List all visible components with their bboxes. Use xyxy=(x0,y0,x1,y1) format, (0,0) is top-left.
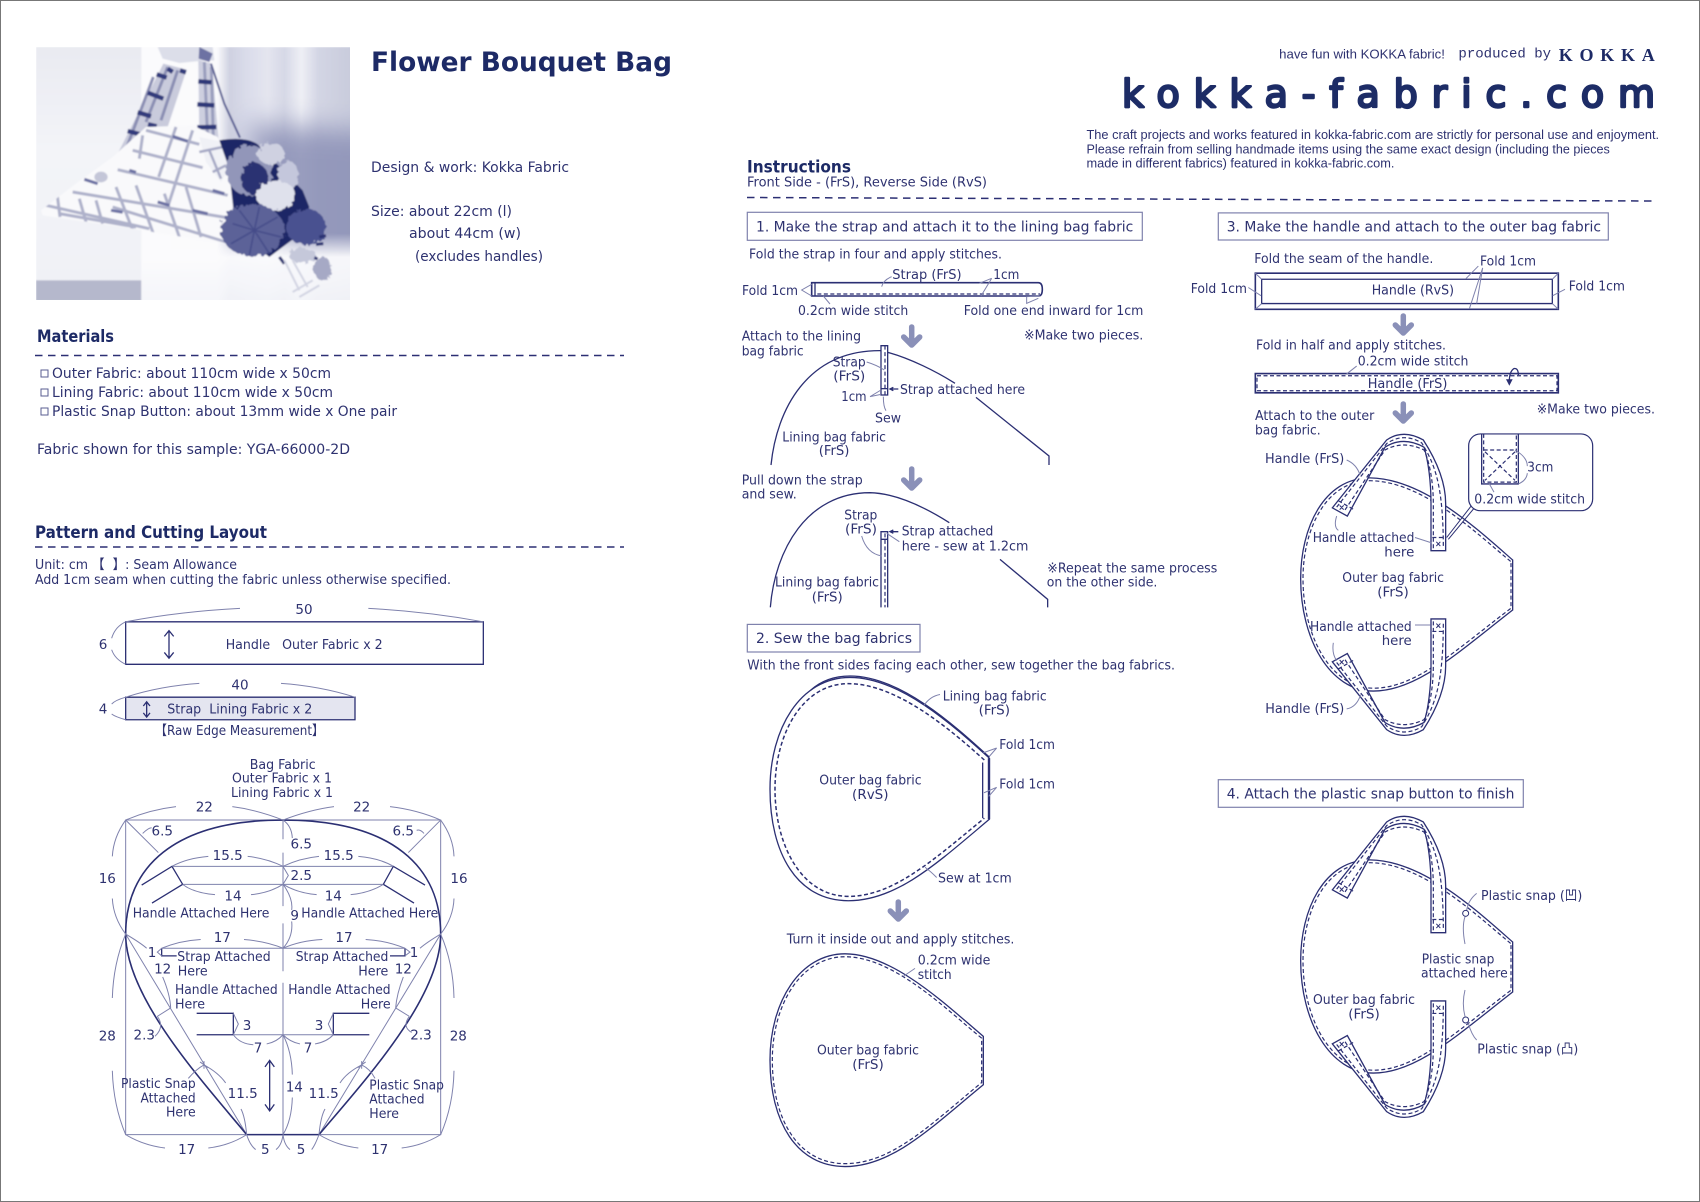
unit note xyxy=(35,557,451,588)
diagram: bag fabric pattern: Attached xyxy=(369,1092,424,1108)
site logotype: kokka-fabric.com xyxy=(1122,72,1655,116)
diagram: handle seam fold: Fold 1cm xyxy=(1569,279,1625,295)
diagram: bag fabric pattern: 14 xyxy=(325,888,342,904)
diagram: bag fabric pattern: 12 xyxy=(395,962,412,978)
diagram: handle seam fold: Fold 1cm xyxy=(1191,281,1247,297)
design and size text block xyxy=(371,160,569,265)
diagram: folded strap: Fold one end inward for 1cm xyxy=(964,303,1143,319)
diagram: pull down the strap xyxy=(742,472,1048,607)
title: Flower Bouquet Bag xyxy=(371,47,672,78)
diagram: bag fabric pattern: 17 xyxy=(335,930,353,946)
diagram: bag fabric pattern: Bag Fabric xyxy=(250,757,316,773)
step 1 heading box: 1. Make the strap and attach it to the lining bag fabric xyxy=(756,220,1133,236)
diagram: finished bag with snaps: Plastic snap xyxy=(1422,951,1494,967)
diagram: sew bag fabrics: Outer bag fabric xyxy=(819,772,922,788)
diagram: bag fabric pattern: 5 xyxy=(297,1142,305,1158)
diagram: turned bag with stitches: stitch xyxy=(918,967,952,983)
diagram: pull down the strap: Lining bag fabric xyxy=(775,575,879,591)
step 4 heading box: 4. Attach the plastic snap button to finish xyxy=(1227,786,1514,802)
panel: step 1 xyxy=(742,212,1217,607)
diagram: outer bag with handles: Outer bag fabric xyxy=(1342,570,1444,586)
diagram: bag fabric pattern: Handle Attached xyxy=(288,982,391,998)
panel: pattern and cutting layout xyxy=(35,523,624,1158)
diagram: bag fabric pattern: Here xyxy=(175,997,205,1013)
diagram: outer bag with handles: Handle attached xyxy=(1313,530,1414,546)
design and size text block: Design & work: Kokka Fabric xyxy=(371,160,569,176)
diagram: outer bag with handles: Handle (FrS) xyxy=(1265,451,1344,467)
arrow xyxy=(1395,316,1411,333)
callout: handle stitch detail: 0.2cm wide stitch xyxy=(1474,492,1585,508)
diagram: finished bag with snaps: attached here xyxy=(1421,966,1508,982)
note: repeat on other side: ※Repeat the same process xyxy=(1047,561,1217,577)
materials list: Plastic Snap Button: about 13mm wide x One pair xyxy=(52,404,397,420)
panel: materials xyxy=(35,327,624,458)
diagram: bag fabric pattern: 6.5 xyxy=(393,823,414,839)
diagram: bag fabric pattern: 11.5 xyxy=(309,1086,339,1102)
KOKKA wordmark: KOKKA xyxy=(1559,45,1655,65)
diagram: pull down the strap: (FrS) xyxy=(812,589,843,605)
diagram: bag fabric pattern: Lining Fabric x 1 xyxy=(231,785,333,801)
diagram: sew bag fabrics: Fold 1cm xyxy=(999,776,1055,792)
diagram: attach strap to lining: (FrS) xyxy=(833,369,865,385)
note: repeat on other side: on the other side. xyxy=(1047,575,1157,591)
diagram: strap piece: 【Raw Edge Measurement】 xyxy=(155,723,324,739)
heading: pattern and cutting layout: Pattern and Cutting Layout xyxy=(35,523,267,542)
diagram: bag fabric pattern: 2.3 xyxy=(134,1027,155,1043)
text: attach to outer bag: bag fabric. xyxy=(1255,422,1321,438)
diagram: finished bag with snaps xyxy=(1301,816,1582,1117)
diagram: bag fabric pattern: 3 xyxy=(243,1018,251,1034)
diagram: attach strap to lining: Attach to the lining xyxy=(742,329,861,345)
diagram: folded strap: 1cm xyxy=(993,267,1019,283)
diagram: bag fabric pattern: 15.5 xyxy=(324,848,354,864)
diagram: strap piece: 4 xyxy=(99,702,107,718)
arrow xyxy=(890,902,906,919)
diagram: bag fabric pattern: 2.5 xyxy=(291,868,312,884)
diagram: handle seam fold xyxy=(1191,251,1625,309)
diagram: handle piece: 6 xyxy=(99,637,107,653)
diagram: outer bag with handles: here xyxy=(1382,633,1412,649)
note: make two pieces: ※Make two pieces. xyxy=(1024,327,1143,343)
design and size text block: about 44cm (w) xyxy=(409,226,521,242)
diagram: handle piece: Handle Outer Fabric x 2 xyxy=(226,637,383,653)
diagram: pull down the strap: Strap xyxy=(844,507,877,523)
panel: step 1: Fold the strap in four and apply stitches. xyxy=(749,246,1002,262)
diagram: bag fabric pattern: Handle Attached xyxy=(175,982,278,998)
diagram: pull down the strap: here - sew at 1.2cm xyxy=(902,538,1028,554)
panel: step 2: Turn it inside out and apply stitches. xyxy=(786,932,1014,948)
diagram: bag fabric pattern: Strap Attached xyxy=(177,949,271,965)
diagram: bag fabric pattern: Here xyxy=(166,1105,196,1121)
header: brand block xyxy=(1086,45,1659,171)
diagram: folded strap: Strap (FrS) xyxy=(892,267,962,283)
diagram: bag fabric pattern: Here xyxy=(358,963,388,979)
callout: handle stitch detail: 3cm xyxy=(1527,459,1553,475)
diagram: bag fabric pattern xyxy=(99,757,468,1158)
diagram: bag fabric pattern: 17 xyxy=(214,930,231,946)
diagram: bag fabric pattern: 16 xyxy=(99,871,116,887)
materials list: Lining Fabric: about 110cm wide x 50cm xyxy=(52,385,333,401)
diagram: bag fabric pattern: 14 xyxy=(224,888,242,904)
diagram: bag fabric pattern: 17 xyxy=(371,1142,388,1158)
diagram: bag fabric pattern: 7 xyxy=(254,1041,262,1057)
diagram: bag fabric pattern: Handle Attached Here xyxy=(133,906,269,922)
produced by: produced by xyxy=(1458,48,1551,63)
diagram: folded handle with stitches: Fold in half and apply stitches. xyxy=(1256,337,1446,353)
design and size text block: Size: about 22cm (l) xyxy=(371,204,512,220)
diagram: finished bag with snaps: Plastic snap (凸) xyxy=(1477,1041,1578,1057)
diagram: bag fabric pattern: 16 xyxy=(450,871,468,887)
diagram: bag fabric pattern: 2.3 xyxy=(410,1027,432,1043)
disclaimer: made in different fabrics) featured in kokka-fabric.com. xyxy=(1086,156,1394,171)
fabric sample note: Fabric shown for this sample: YGA-66000-2D xyxy=(37,442,350,458)
diagram: strap piece xyxy=(99,678,355,739)
diagram: pull down the strap: (FrS) xyxy=(845,521,877,537)
diagram: folded handle with stitches: 0.2cm wide stitch xyxy=(1358,353,1468,369)
materials list xyxy=(41,366,397,420)
diagram: bag fabric pattern: Attached xyxy=(140,1090,196,1106)
photo: bag with flower bouquet xyxy=(36,47,350,300)
diagram: handle seam fold: Fold the seam of the handle. xyxy=(1254,251,1433,267)
diagram: turned bag with stitches xyxy=(770,953,990,1167)
disclaimer xyxy=(1086,127,1659,171)
diagram: sew bag fabrics: (FrS) xyxy=(979,702,1010,718)
panel: step 4 xyxy=(1218,780,1582,1117)
diagram: attach strap to lining xyxy=(742,329,1049,465)
diagram: bag fabric pattern: 22 xyxy=(353,800,370,816)
diagram: bag fabric pattern: 12 xyxy=(154,962,171,978)
diagram: handle piece xyxy=(99,602,483,664)
diagram: turned bag with stitches: 0.2cm wide xyxy=(918,953,990,969)
diagram: outer bag with handles: Handle (FrS) xyxy=(1265,701,1344,717)
diagram: pull down the strap: Pull down the strap xyxy=(742,472,863,488)
note: make two pieces: ※Make two pieces. xyxy=(1537,402,1655,418)
diagram: folded handle with stitches xyxy=(1255,337,1558,393)
panel: step 2 xyxy=(747,624,1175,1167)
text: attach to outer bag xyxy=(1255,408,1375,438)
diagram: bag fabric pattern: 22 xyxy=(196,800,213,816)
diagram: sew bag fabrics: (RvS) xyxy=(852,787,889,803)
diagram: finished bag with snaps: Outer bag fabric xyxy=(1313,992,1415,1008)
step 4 heading box xyxy=(1218,780,1523,807)
diagram: bag fabric pattern: Handle Attached Here xyxy=(301,906,438,922)
unit note: Unit: cm 【 】: Seam Allowance xyxy=(35,557,237,573)
step 2 heading box: 2. Sew the bag fabrics xyxy=(756,631,912,647)
diagram: bag fabric pattern: Here xyxy=(369,1106,399,1122)
diagram: bag fabric pattern: 1 xyxy=(410,945,418,961)
diagram: bag fabric pattern: Here xyxy=(361,997,391,1013)
diagram: finished bag with snaps: (FrS) xyxy=(1348,1006,1380,1022)
step 2 heading box xyxy=(747,624,920,652)
diagram: turned bag with stitches: (FrS) xyxy=(852,1057,884,1073)
diagram: bag fabric pattern: Outer Fabric x 1 xyxy=(232,770,332,786)
diagram: sew bag fabrics xyxy=(770,676,1055,901)
heading: instructions: Front Side - (FrS), Reverse Side (RvS) xyxy=(747,175,987,191)
diagram: folded handle with stitches: Handle (FrS) xyxy=(1368,376,1447,392)
diagram: outer bag with handles: here xyxy=(1384,544,1414,560)
diagram: bag fabric pattern: 6.5 xyxy=(152,823,173,839)
heading: materials: Materials xyxy=(37,327,114,346)
diagram: attach strap to lining: Lining bag fabric xyxy=(782,429,886,445)
note: repeat on other side xyxy=(1047,561,1217,591)
diagram: bag fabric pattern: 11.5 xyxy=(228,1086,258,1102)
callout: handle stitch detail xyxy=(1447,434,1593,539)
diagram: attach strap to lining: Strap attached here xyxy=(900,382,1025,398)
diagram: bag fabric pattern: 15.5 xyxy=(213,848,243,864)
diagram: bag fabric pattern: 17 xyxy=(178,1142,195,1158)
diagram: bag fabric pattern: 6.5 xyxy=(291,836,312,852)
arrow xyxy=(1395,404,1411,421)
diagram: bag fabric pattern: 9 xyxy=(290,908,299,924)
diagram: bag fabric pattern: Here xyxy=(178,963,208,979)
diagram: strap piece: Strap Lining Fabric x 2 xyxy=(167,702,312,718)
diagram: sew bag fabrics: Fold 1cm xyxy=(999,737,1055,753)
diagram: sew bag fabrics: Sew at 1cm xyxy=(938,870,1012,886)
step 1 heading box xyxy=(747,212,1142,240)
diagram: attach strap to lining: bag fabric xyxy=(742,343,804,359)
diagram: finished bag with snaps: Plastic snap (凹) xyxy=(1481,888,1582,904)
diagram: bag fabric pattern: 28 xyxy=(450,1028,467,1044)
text: attach to outer bag: Attach to the outer xyxy=(1255,408,1375,424)
diagram: attach strap to lining: (FrS) xyxy=(819,443,849,459)
disclaimer: Please refrain from selling handmade items using the same exact design (including the pieces xyxy=(1086,142,1610,157)
diagram: outer bag with handles xyxy=(1265,434,1513,735)
diagram: pull down the strap: Strap attached xyxy=(902,524,993,540)
diagram: sew bag fabrics: Lining bag fabric xyxy=(943,689,1047,705)
diagram: bag fabric pattern: 5 xyxy=(261,1142,270,1158)
diagram: bag fabric pattern: 3 xyxy=(315,1018,323,1034)
panel: step 3 xyxy=(1191,213,1655,735)
diagram: bag fabric pattern: Plastic Snap xyxy=(369,1078,444,1094)
diagram: attach strap to lining: 1cm xyxy=(841,389,867,405)
diagram: handle seam fold: Fold 1cm xyxy=(1480,253,1536,269)
diagram: turned bag with stitches: Outer bag fabric xyxy=(817,1042,919,1058)
diagram: bag fabric pattern: 14 xyxy=(286,1079,303,1095)
diagram: folded strap: Fold 1cm xyxy=(742,283,798,299)
diagram: strap piece: 40 xyxy=(231,678,249,694)
step 3 heading box: 3. Make the handle and attach to the outer bag fabric xyxy=(1227,219,1601,235)
diagram: folded strap xyxy=(742,267,1143,319)
panel: step 2: With the front sides facing each other, sew together the bag fabrics. xyxy=(747,658,1175,674)
diagram: bag fabric pattern: Plastic Snap xyxy=(121,1076,196,1092)
diagram: handle piece: 50 xyxy=(295,602,313,618)
tagline: have fun with KOKKA fabric! xyxy=(1279,46,1445,61)
heading: instructions xyxy=(747,157,1652,201)
diagram: outer bag with handles: Handle attached xyxy=(1310,619,1412,635)
diagram: attach strap to lining: Strap xyxy=(833,355,866,371)
diagram: bag fabric pattern: 1 xyxy=(148,945,156,961)
diagram: bag fabric pattern: 7 xyxy=(304,1041,312,1057)
diagram: folded strap: 0.2cm wide stitch xyxy=(798,303,908,319)
diagram: handle seam fold: Handle (RvS) xyxy=(1372,283,1454,299)
diagram: pull down the strap: and sew. xyxy=(742,486,797,502)
step 3 heading box xyxy=(1218,213,1608,240)
diagram: outer bag with handles: (FrS) xyxy=(1377,584,1409,600)
materials list: Outer Fabric: about 110cm wide x 50cm xyxy=(52,366,331,382)
diagram: attach strap to lining: Sew xyxy=(875,411,901,427)
heading: instructions: Instructions xyxy=(747,157,851,176)
disclaimer: The craft projects and works featured in kokka-fabric.com are strictly for personal use and enjoyment. xyxy=(1086,127,1659,142)
arrow xyxy=(904,469,920,488)
diagram: bag fabric pattern: Strap Attached xyxy=(296,949,388,965)
design and size text block: (excludes handles) xyxy=(415,249,543,265)
diagram: bag fabric pattern: 28 xyxy=(99,1028,116,1044)
arrow xyxy=(904,327,920,345)
unit note: Add 1cm seam when cutting the fabric unless otherwise specified. xyxy=(35,572,451,588)
